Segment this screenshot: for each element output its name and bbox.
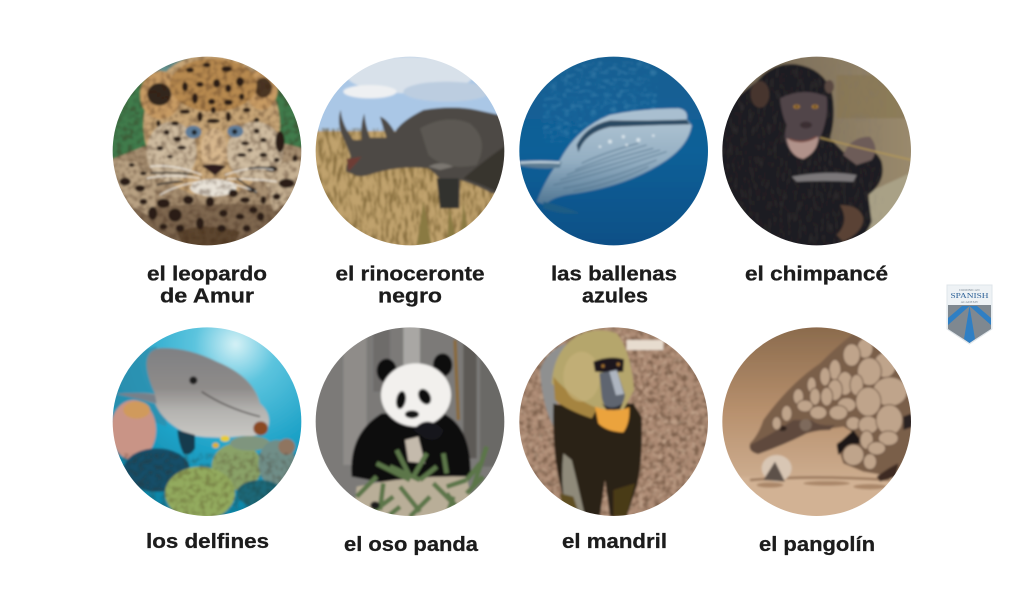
logo: academy shield: ACADEMY [961, 300, 979, 304]
label: las ballenas azules [551, 262, 677, 308]
photo: mandrill [517, 325, 710, 518]
logo: academy shield: DOMINICAN [959, 288, 980, 292]
label: el rinoceronte negro: negro [378, 284, 442, 308]
photo: blue whale [517, 55, 710, 248]
logo: academy shield: SPANISH [950, 291, 989, 300]
label: el leopardo de Amur [147, 262, 267, 308]
photo: Amur leopard cub [110, 53, 303, 248]
label: el leopardo de Amur: de Amur [160, 284, 254, 308]
photo: giant panda [313, 325, 507, 523]
label: el oso panda: el oso panda [344, 533, 479, 556]
photo: dolphin and reef [110, 325, 303, 520]
label: el pangolín: el pangolín [759, 533, 875, 556]
label: el mandril: el mandril [562, 530, 667, 553]
photo: chimpanzee [720, 55, 913, 248]
label: las ballenas azules: las ballenas [551, 262, 677, 286]
label: las ballenas azules: azules [582, 284, 648, 308]
photo: black rhino [313, 55, 507, 248]
label: el rinoceronte negro [336, 262, 484, 308]
label: el chimpancé: el chimpancé [745, 262, 888, 286]
photo: pangolin [720, 325, 913, 520]
logo: academy shield [947, 285, 992, 344]
label: el rinoceronte negro: el rinoceronte [336, 262, 484, 286]
label: los delfines: los delfines [146, 530, 269, 553]
label: el leopardo de Amur: el leopardo [147, 262, 267, 286]
